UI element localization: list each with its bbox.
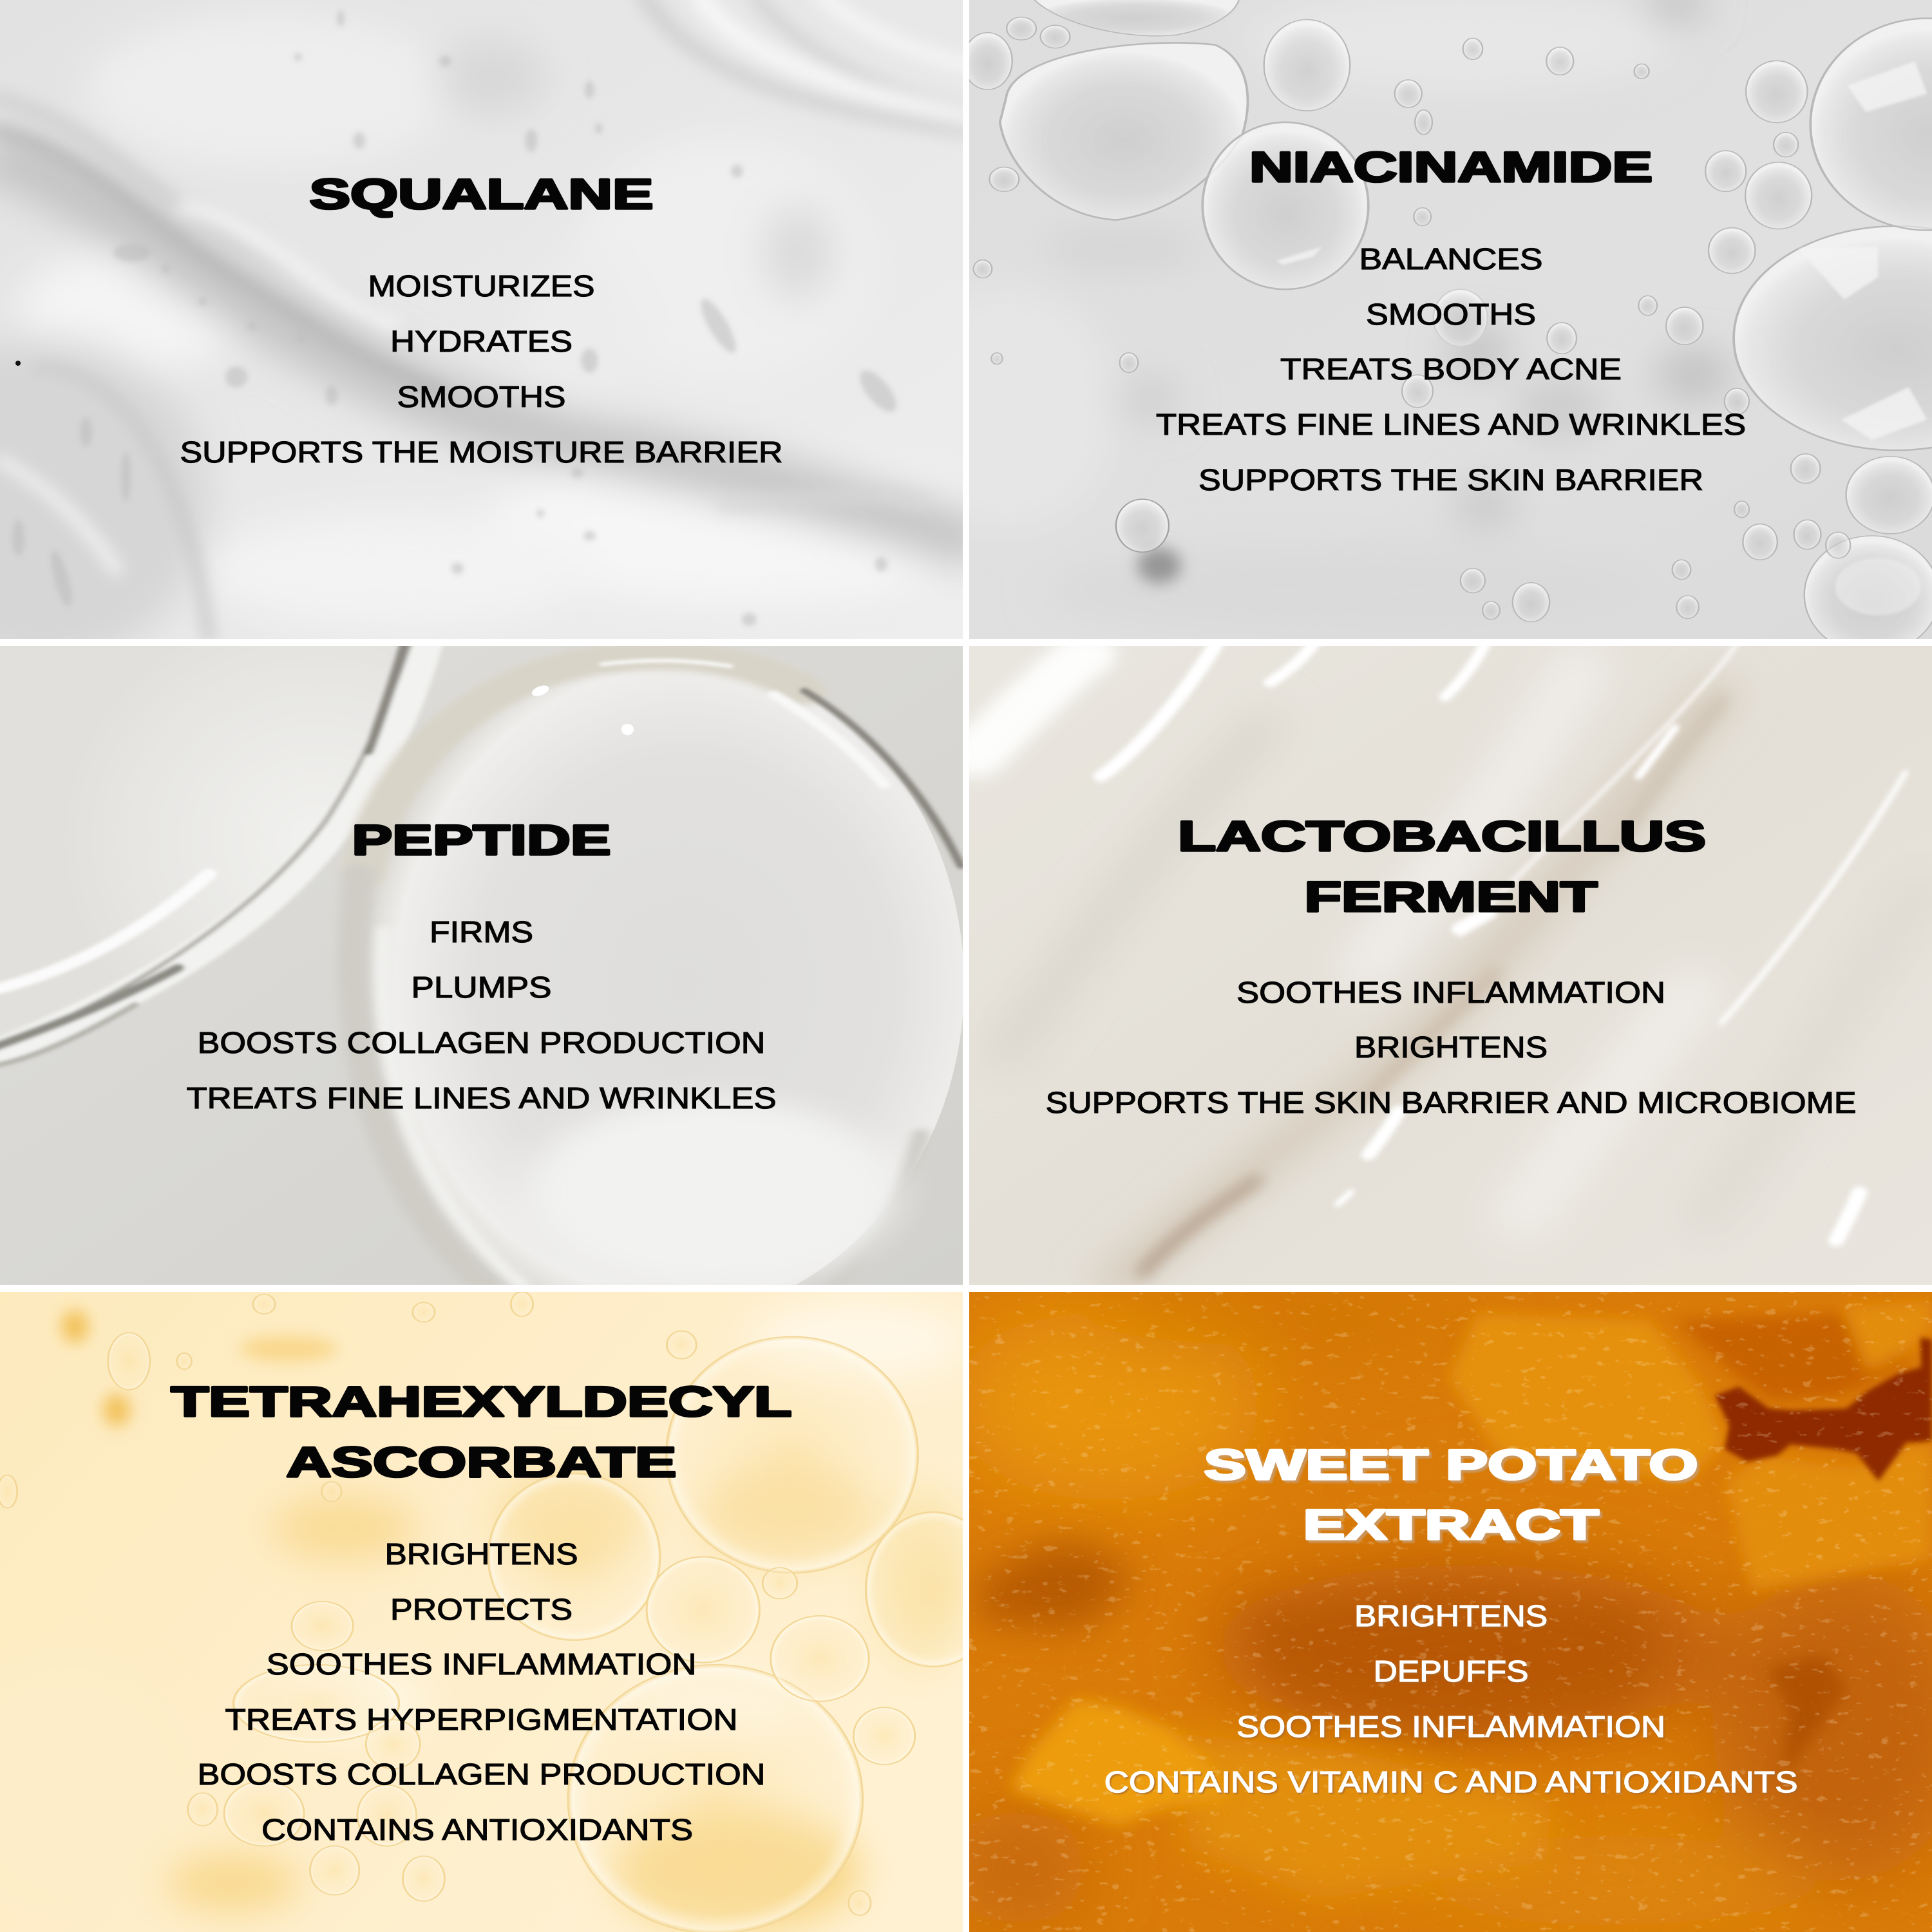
speck [15, 361, 21, 366]
left disc [0, 642, 424, 1066]
panel: sweet potato extract [947, 1292, 1932, 1932]
panel: tetrahexyldecyl ascorbate [0, 1292, 1001, 1932]
benefit list: HYDRATES [390, 325, 573, 358]
benefit list [187, 915, 777, 1115]
panel: lactobacillus ferment [969, 644, 1932, 1285]
benefit list: SUPPORTS THE MOISTURE BARRIER [180, 435, 783, 469]
shadow: droplet [1137, 547, 1181, 583]
heading [171, 1378, 792, 1486]
panel: niacinamide [896, 0, 1932, 654]
benefit list: BOOSTS COLLAGEN PRODUCTION [197, 1757, 765, 1791]
heading: ASCORBATE [286, 1438, 676, 1486]
background: mashed sweet potato [947, 1292, 1932, 1932]
benefit list [1046, 976, 1856, 1119]
heading: SWEET POTATO [1204, 1441, 1698, 1488]
heading: SQUALANE [309, 170, 653, 218]
bubble highlights [1276, 61, 1927, 615]
benefit list [180, 269, 783, 469]
heading: NIACINAMIDE [1249, 143, 1653, 191]
benefit list: SOOTHES INFLAMMATION [1236, 1710, 1665, 1743]
heading: FERMENT [1305, 873, 1597, 920]
benefit list: SMOOTHS [1366, 298, 1536, 331]
right disc [344, 646, 964, 1322]
panel: peptide [0, 642, 964, 1322]
benefit list: PLUMPS [411, 971, 551, 1004]
background: golden serum bubbles [0, 1292, 1001, 1932]
benefit list: TREATS FINE LINES AND WRINKLES [187, 1081, 777, 1115]
heading: EXTRACT [1303, 1501, 1598, 1548]
heading: PEPTIDE [352, 816, 611, 864]
benefit list: FIRMS [430, 915, 533, 949]
benefit list: TREATS HYPERPIGMENTATION [225, 1703, 738, 1736]
background: clear gel texture [0, 0, 995, 664]
benefit list: SUPPORTS THE SKIN BARRIER [1198, 463, 1703, 497]
dark crevice [1715, 1338, 1932, 1481]
benefit list: BRIGHTENS [385, 1537, 578, 1571]
benefit list: SOOTHES INFLAMMATION [1236, 976, 1665, 1009]
benefit list: CONTAINS VITAMIN C AND ANTIOXIDANTS [1104, 1765, 1798, 1799]
benefit list: CONTAINS ANTIOXIDANTS [261, 1813, 693, 1846]
benefit list [197, 1537, 765, 1846]
surface specks [969, 1292, 1932, 1932]
benefit list [1156, 242, 1746, 497]
background: serum bubbles [896, 0, 1932, 654]
benefit list: MOISTURIZES [368, 269, 595, 303]
panel: squalane [0, 0, 995, 664]
heading [1178, 812, 1706, 920]
benefit list: TREATS BODY ACNE [1280, 352, 1622, 386]
benefit list: PROTECTS [390, 1593, 573, 1626]
benefit list: BOOSTS COLLAGEN PRODUCTION [197, 1026, 765, 1059]
heading: TETRAHEXYLDECYL [171, 1378, 792, 1425]
background: glass discs [0, 642, 964, 1322]
benefit list: SUPPORTS THE SKIN BARRIER AND MICROBIOME [1046, 1086, 1856, 1119]
benefit list: SMOOTHS [397, 380, 565, 413]
benefit list: TREATS FINE LINES AND WRINKLES [1156, 408, 1746, 441]
benefit list: BRIGHTENS [1354, 1599, 1548, 1633]
heading [1204, 1441, 1698, 1548]
heading: LACTOBACILLUS [1178, 812, 1706, 860]
benefit list: DEPUFFS [1373, 1654, 1529, 1688]
benefit list: BALANCES [1359, 242, 1543, 276]
background: cream swatch [969, 644, 1932, 1285]
benefit list: SOOTHES INFLAMMATION [267, 1647, 697, 1681]
benefit list [1104, 1599, 1798, 1799]
benefit list: BRIGHTENS [1354, 1030, 1548, 1064]
